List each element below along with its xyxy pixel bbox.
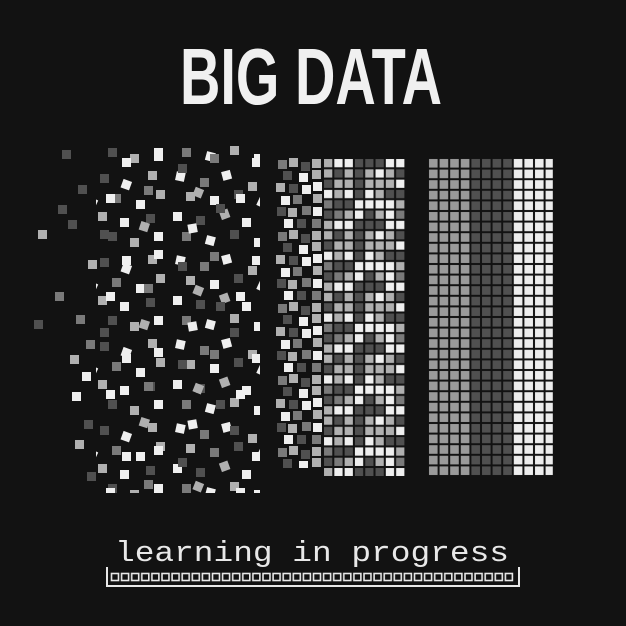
scattered data squares xyxy=(34,145,260,493)
caption: learning in progress: learning in progress xyxy=(115,537,509,570)
mixed grid xyxy=(323,158,405,476)
title: BIG DATA xyxy=(180,32,442,121)
ordered grid: dark xyxy=(470,158,513,476)
ordered grid: white xyxy=(513,158,553,476)
ordered grid: gray xyxy=(428,158,470,476)
transition squares xyxy=(275,156,323,468)
progress bar xyxy=(107,567,519,587)
